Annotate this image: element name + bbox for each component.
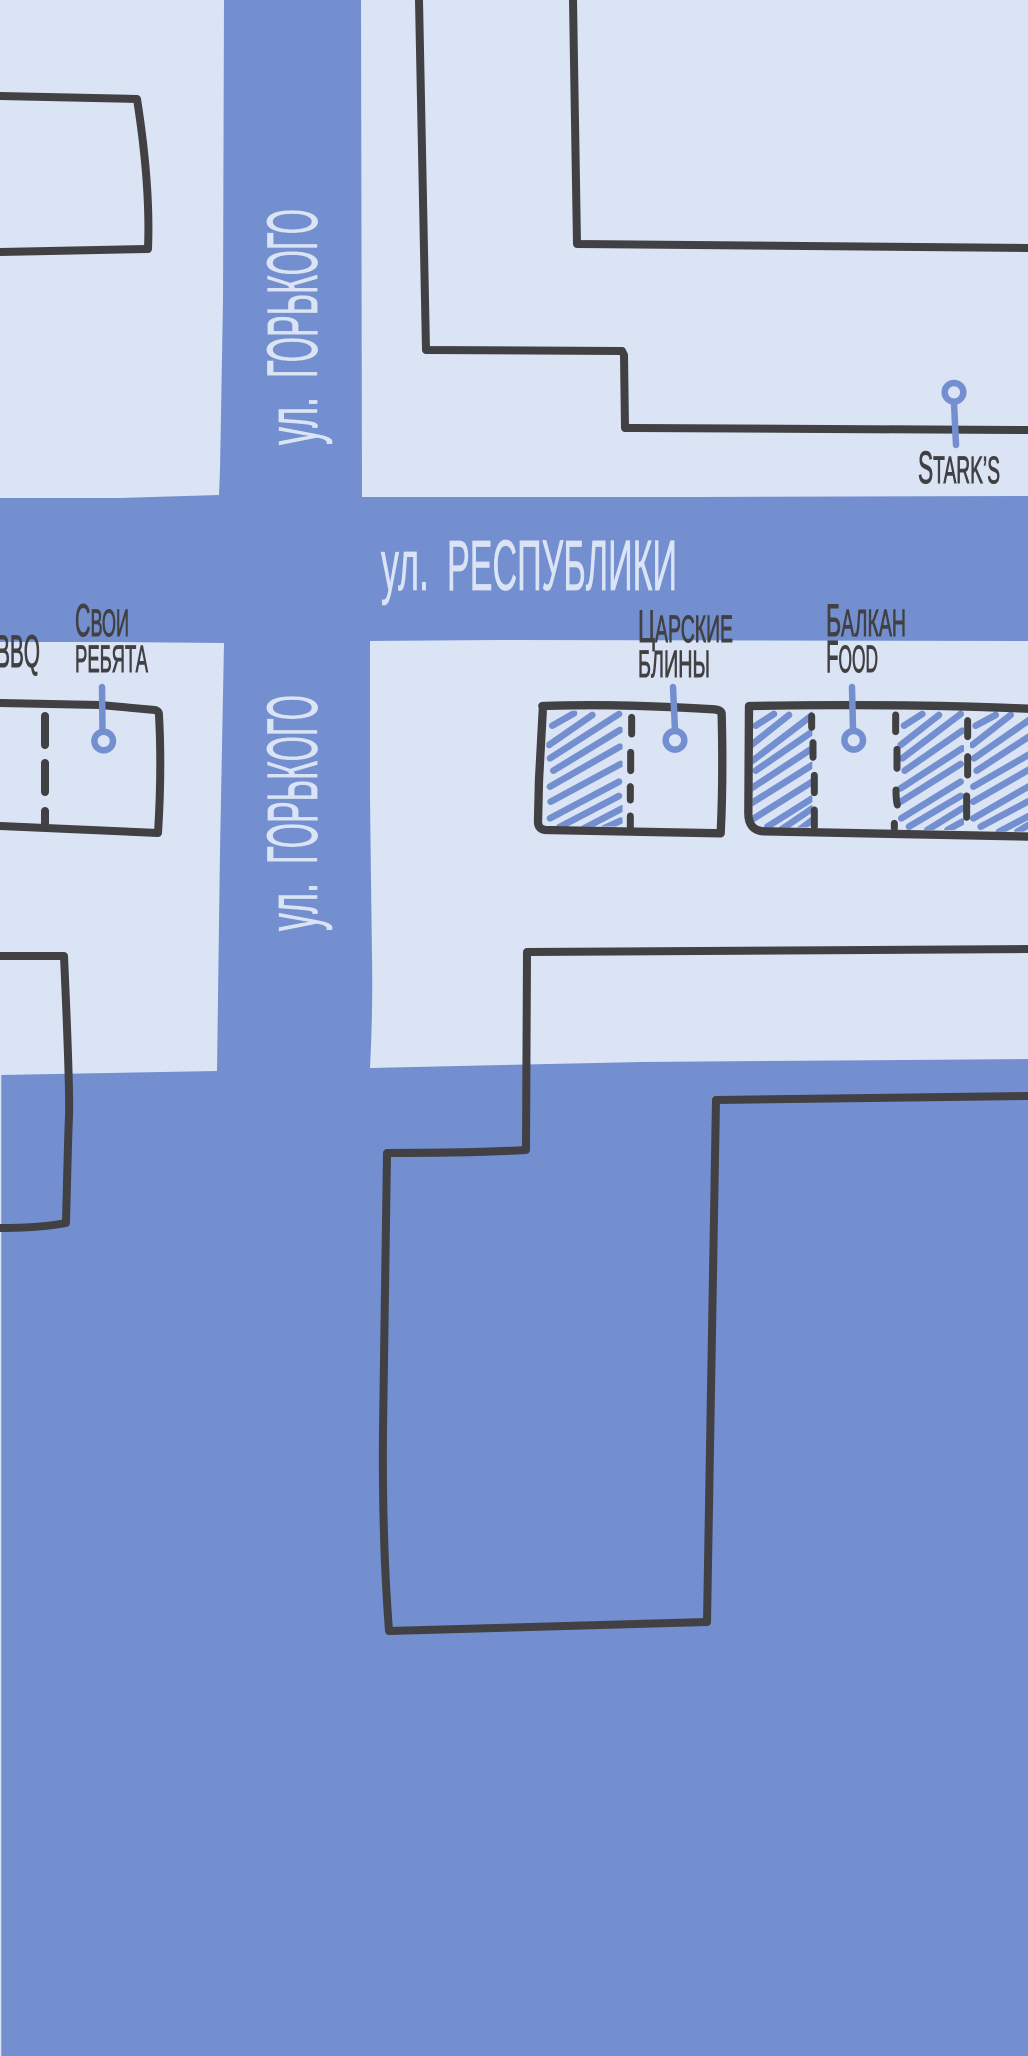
shop label: Свои ребята: СВОИ	[75, 595, 129, 646]
shop divider dashes	[41, 716, 49, 826]
street label: ул. Республики	[381, 527, 677, 606]
city block: lower right	[370, 640, 1028, 1068]
hatching: Царские блины	[549, 713, 622, 828]
city block: top left	[0, 0, 224, 498]
street map: РЕСПУБЛИКИ	[447, 527, 677, 606]
building: lower left	[0, 956, 69, 1228]
shop dividers: Балкан Food	[812, 715, 968, 828]
shop label: Балкан Food: БАЛКАН	[826, 595, 906, 646]
shop outline: Балкан Food	[748, 705, 1028, 837]
pin: Свои ребята	[94, 687, 113, 750]
street label: ул. Горького lower: ул.	[254, 883, 333, 931]
pin: Балкан Food	[844, 687, 863, 750]
street map: РЕБЯТА	[75, 639, 148, 681]
hatching: left of Балкан Food	[751, 714, 812, 830]
street map: ГОРЬКОГО	[254, 209, 333, 378]
city block: lower left	[0, 642, 224, 2056]
hatching: far right shop	[972, 715, 1028, 832]
hatching: right of Балкан Food	[901, 714, 962, 830]
street label: ул. Горького upper	[254, 209, 333, 445]
pin: Stark's	[945, 383, 963, 445]
street map: ГОРЬКОГО	[254, 695, 333, 864]
building: top centre outline	[419, 0, 1028, 430]
building: large lower centre	[383, 949, 1028, 1631]
street label: ул. Республики: ул.	[381, 527, 429, 606]
shop dividers: Царские блины	[630, 717, 632, 827]
shop label: Балкан Food: FOOD	[826, 631, 878, 682]
zoomed-coordinate shop group: right side	[538, 705, 1028, 837]
shop outline: Царские блины	[538, 705, 722, 833]
shop label: Царские блины: ЦАРСКИЕ	[638, 601, 733, 652]
building: top right outline	[573, 0, 1028, 248]
city block: top right	[361, 0, 1028, 497]
building: lower left shop row	[0, 703, 160, 833]
shop outline: lower left	[0, 703, 160, 833]
street label: ул. Горького lower	[254, 695, 333, 931]
shop label: Царские блины: БЛИНЫ	[638, 644, 710, 686]
shop label: Царские блины	[638, 601, 733, 686]
pin: Царские блины	[666, 687, 684, 750]
shop label: Балкан Food	[826, 595, 906, 682]
building: top left	[0, 96, 148, 252]
street label: ул. Горького upper: ул.	[254, 397, 333, 445]
shop label: Свои ребята	[75, 595, 148, 681]
